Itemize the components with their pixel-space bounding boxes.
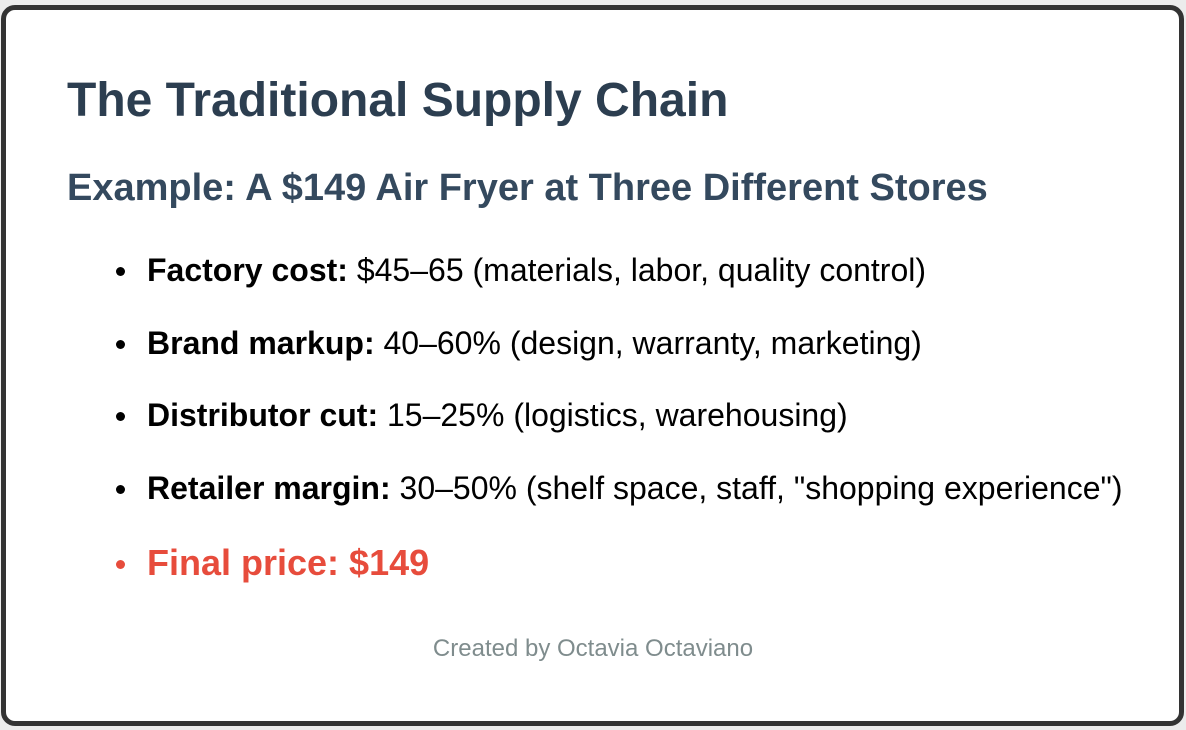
subtitle: Example: A $149 Air Fryer at Three Different Stores xyxy=(67,167,988,209)
bullet: factory cost: Factory cost: $45–65 (materials, labor, quality control) xyxy=(147,252,926,288)
bullet: distributor cut: Distributor cut: 15–25% (logistics, warehousing) xyxy=(147,397,848,433)
bullet: brand markup: Brand markup: 40–60% (design, warranty, marketing) xyxy=(147,325,922,361)
footer credit: Created by Octavia Octaviano xyxy=(433,635,753,662)
bullet: final price: Final price: $149 xyxy=(147,542,429,583)
bullet: retailer margin: Retailer margin: 30–50% (shelf space, staff, "shopping experience") xyxy=(147,470,1123,506)
title: The Traditional Supply Chain xyxy=(67,74,728,127)
